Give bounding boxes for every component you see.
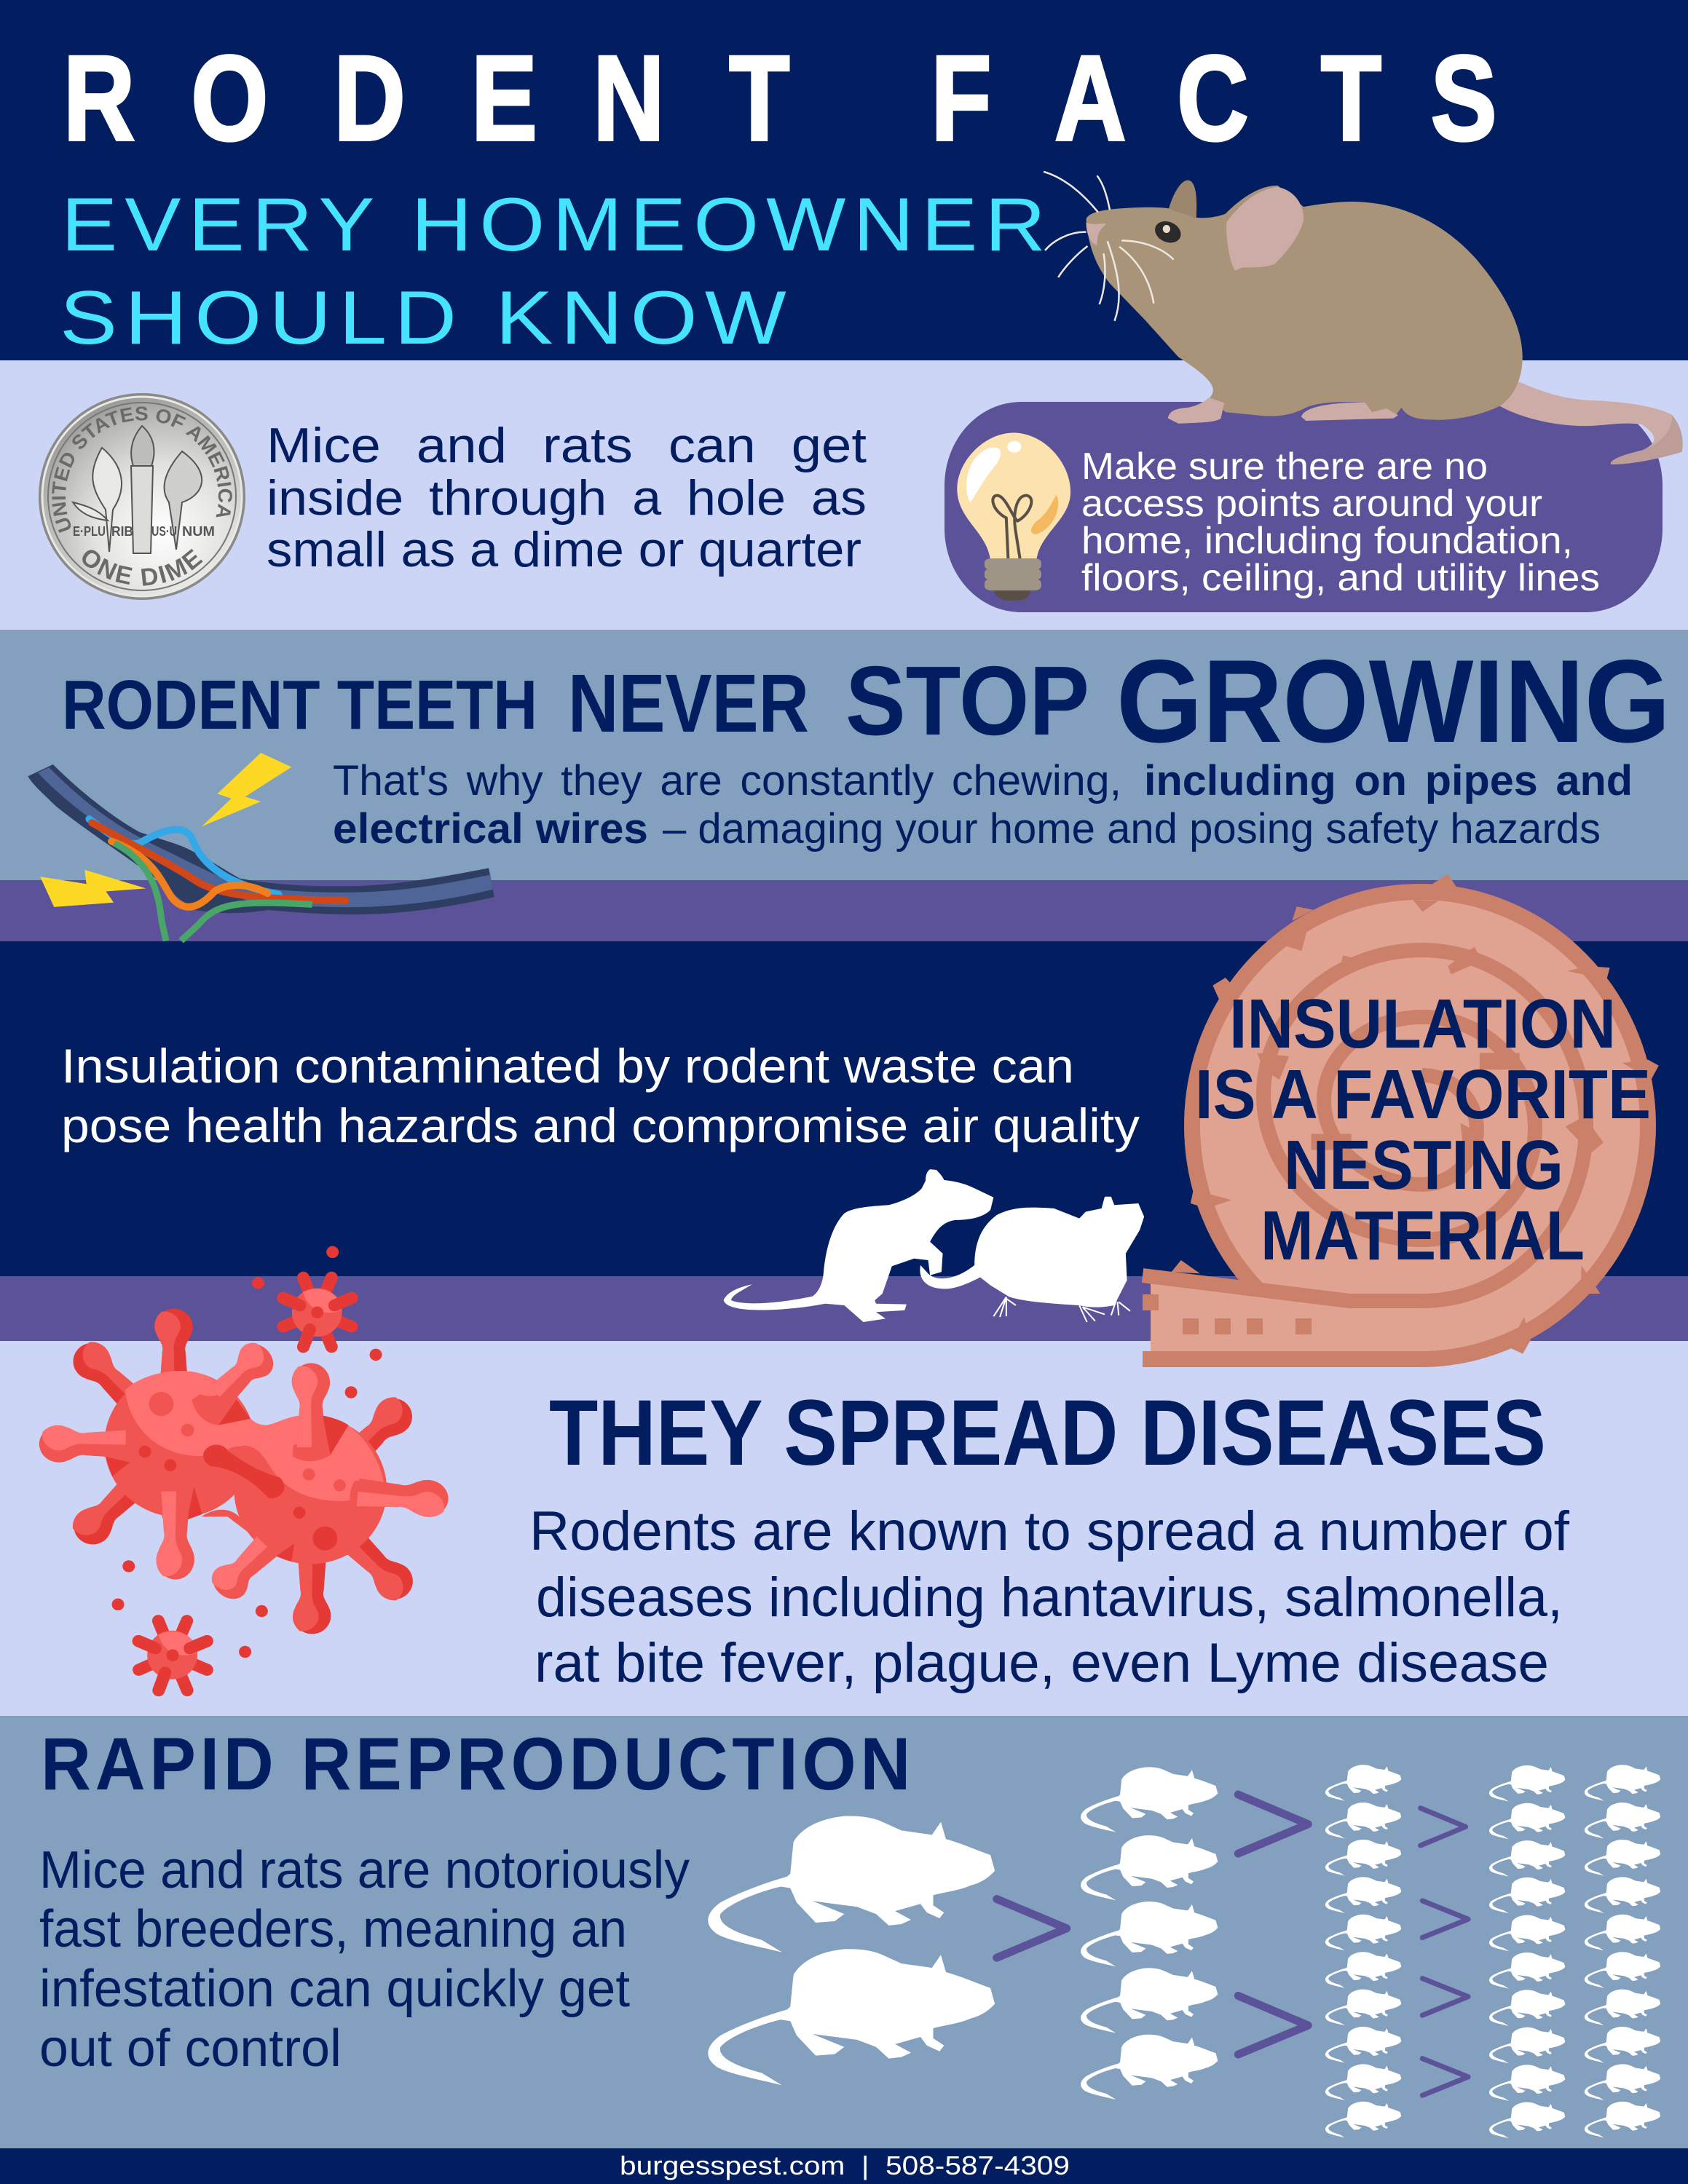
text: breeding explanation: Mice and rats are notoriously — [39, 1841, 690, 1899]
icon: dime coin: US·U — [151, 524, 177, 539]
background: navy footer band — [0, 2148, 1688, 2184]
text: insulation hazard — [61, 1039, 1140, 1152]
background: lavender disease band — [0, 1341, 1688, 1716]
text: breeding explanation: fast breeders, meaning an — [39, 1900, 627, 1958]
icon: virus cluster — [39, 1246, 450, 1690]
heading: rodent teeth never stop growing — [62, 636, 1671, 767]
background: purple stripe — [0, 880, 1688, 941]
heading: rodent teeth never stop growing: RODENT TEETH — [62, 666, 537, 744]
background: steel-blue reproduction band — [0, 1716, 1688, 2148]
text: disease list: diseases including hantavirus, salmonella, — [536, 1567, 1563, 1629]
subtitle — [60, 183, 1053, 360]
text: access points tip — [1081, 446, 1600, 599]
text: dime fact: small as a dime or quarter — [267, 522, 861, 577]
text: breeding explanation: infestation can quickly get — [39, 1960, 630, 2018]
heading: rapid reproduction: RAPID REPRODUCTION — [41, 1722, 915, 1805]
front spikes — [39, 1337, 450, 1606]
heading: insulation nesting material — [1195, 985, 1651, 1275]
rear spikes — [66, 1309, 421, 1634]
text: disease list: rat bite fever, plague, even Lyme disease — [535, 1632, 1549, 1694]
text: access points tip: access points around your — [1081, 483, 1542, 525]
icon: dime coin: NUM — [182, 524, 215, 539]
title: RODENT FACTS — [63, 31, 1497, 166]
text: dime fact: inside through a hole as — [267, 470, 867, 526]
background: navy insulation band — [0, 941, 1688, 1276]
text: chewing explanation: – damaging your home and posing safety hazards — [663, 805, 1601, 852]
heading: insulation nesting material: INSULATION — [1229, 985, 1616, 1063]
text: chewing explanation — [333, 757, 1633, 852]
text: access points tip: home, including foundation, — [1081, 520, 1573, 562]
heading: insulation nesting material: NESTING — [1284, 1126, 1563, 1204]
background: navy header band — [0, 0, 1688, 360]
text: chewing explanation: That's why they are constantly chewing, — [333, 757, 1121, 804]
text: insulation hazard: Insulation contaminated by rodent waste can — [61, 1039, 1074, 1093]
icon: dime coin: UNITED STATES OF AMERICA — [52, 406, 232, 533]
icon: two white rats — [724, 1169, 1144, 1322]
background: lavender dime band — [0, 360, 1688, 630]
text: disease list — [529, 1500, 1570, 1694]
illustration: mouse — [1044, 172, 1683, 464]
icon: dime coin: E·PLU — [73, 524, 106, 539]
icon: damaged cable — [28, 753, 494, 941]
footer contact: burgesspest.com | 508-587-4309 — [620, 2151, 1070, 2180]
heading: insulation nesting material: MATERIAL — [1261, 1197, 1585, 1275]
illustration: insulation roll — [1143, 874, 1659, 1367]
text: access points tip: floors, ceiling, and utility lines — [1081, 557, 1600, 599]
chart: rat multiplication pyramid — [708, 1765, 1660, 2138]
heading: rodent teeth never stop growing: NEVER — [568, 657, 809, 749]
background: steel-blue teeth band — [0, 630, 1688, 880]
icon: dime coin: ONE DIME — [82, 549, 202, 586]
subtitle: SHOULD KNOW — [60, 276, 794, 360]
icon: light bulb — [957, 432, 1070, 601]
panel: access points callout — [944, 402, 1663, 612]
text: disease list: Rodents are known to spread a number of — [529, 1500, 1570, 1562]
text: chewing explanation: including on pipes and — [1144, 757, 1633, 804]
subtitle: EVERY HOMEOWNER — [61, 183, 1053, 267]
icon: dime coin: RIB — [111, 524, 133, 539]
text: breeding explanation: out of control — [39, 2019, 342, 2078]
text: dime fact: Mice and rats can get — [267, 418, 867, 473]
text: chewing explanation: electrical wires — [333, 805, 648, 852]
text: access points tip: Make sure there are no — [1081, 446, 1488, 488]
heading: rodent teeth never stop growing: STOP — [845, 646, 1089, 756]
icon: dime coin — [39, 393, 245, 600]
heading: insulation nesting material: IS A FAVORITE — [1195, 1056, 1651, 1133]
text: insulation hazard: pose health hazards and compromise air quality — [61, 1099, 1140, 1152]
background: purple stripe lower — [0, 1276, 1688, 1341]
mouse tail — [1500, 381, 1683, 464]
text: breeding explanation — [39, 1841, 690, 2078]
heading: they spread diseases: THEY SPREAD DISEASES — [549, 1381, 1546, 1485]
text: dime fact — [267, 418, 867, 577]
